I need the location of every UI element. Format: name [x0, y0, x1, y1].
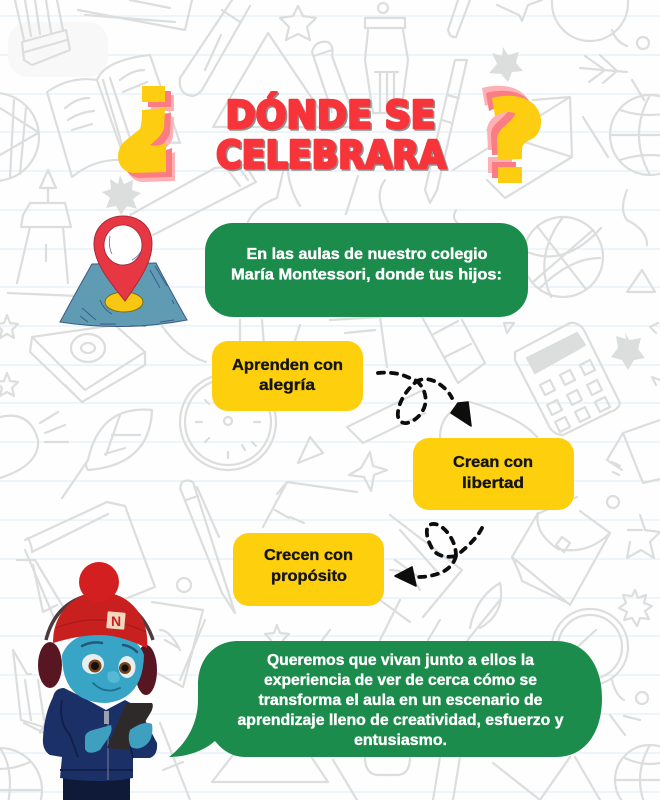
card: aprenden con alegría [212, 341, 363, 411]
card: crean con libertad: Crean con [453, 454, 533, 471]
speech bubble: closing message: aprendizaje lleno de creatividad, esfuerzo y [238, 712, 564, 729]
panel: intro message: En las aulas de nuestro colegio [246, 246, 488, 263]
title: CELEBRARA [216, 133, 447, 177]
title: DÓNDE SE [226, 93, 436, 137]
arrow: dashed loop to crean con libertad [378, 373, 471, 426]
speech bubble: closing message: Queremos que vivan junto a ellos la [267, 652, 534, 669]
mascot trousers [63, 776, 130, 800]
mascot hoodie [43, 688, 157, 781]
title: DÓNDE SE [227, 94, 437, 138]
title: CELEBRARA [218, 134, 448, 178]
card: crecen con propósito [233, 533, 384, 606]
title [216, 93, 448, 178]
speech bubble: closing message [169, 641, 602, 757]
arrow: dashed loop to crecen con propósito [395, 524, 482, 586]
card: crean con libertad: libertad [462, 475, 524, 492]
card: crecen con propósito: propósito [271, 568, 347, 585]
panel: intro message [205, 223, 528, 317]
mascot headphone band and ear cups [46, 594, 153, 640]
icon: inverted question mark [118, 86, 175, 182]
card: crecen con propósito: Crecen con [264, 547, 353, 564]
mascot beanie [53, 592, 147, 648]
panel: intro message: María Montessori, donde tus hijos: [231, 266, 502, 284]
mascot face [62, 632, 144, 703]
character: blue mascot with red beanie, headphones and phone: N [111, 613, 121, 629]
speech bubble: closing message: experiencia de ver de cerca cómo se [264, 672, 537, 689]
card: aprenden con alegría: alegría [259, 377, 315, 394]
icon: map location pin [60, 216, 187, 327]
card: aprenden con alegría: Aprenden con [232, 357, 343, 374]
speech bubble: closing message: entusiasmo. [354, 732, 447, 749]
icon: question mark [482, 86, 541, 183]
speech bubble: closing message: transforma el aula en un escenario de [258, 692, 543, 709]
card: crean con libertad [413, 438, 574, 510]
character: blue mascot with red beanie, headphones and phone [38, 562, 157, 800]
mascot phone and hands [107, 703, 153, 750]
